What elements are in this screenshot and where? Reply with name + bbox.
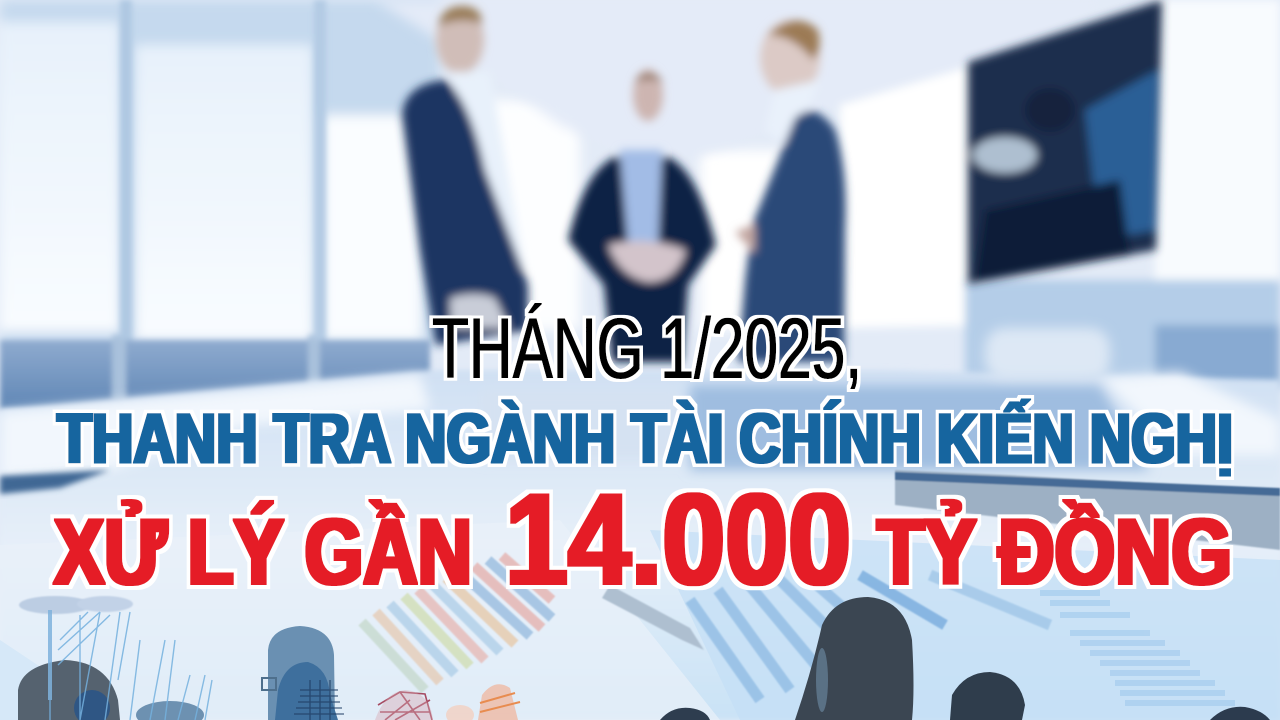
- silhouette: maroon grid head: [378, 692, 432, 720]
- staircase chart: [1040, 590, 1235, 706]
- people: three blurred businessmen: [402, 6, 846, 362]
- striped bar chart: colorful: [362, 556, 552, 690]
- silhouettes of people at bottom: [18, 597, 1270, 720]
- book on right of table: [895, 470, 1280, 550]
- left wall band: [0, 0, 430, 410]
- person right: [735, 20, 846, 362]
- silhouette: orange head: [478, 684, 518, 720]
- silhouette: center-left glasses man: [268, 626, 335, 720]
- person left: [402, 6, 528, 345]
- silhouette: small head center: [660, 708, 710, 720]
- hatched chart over head: [294, 680, 344, 720]
- striped bar chart: blue: [690, 570, 1050, 700]
- left windows: [0, 0, 840, 345]
- left pie chart: [19, 596, 91, 614]
- silhouette: big foreground head: [795, 597, 914, 720]
- wall screen: [968, 0, 1162, 284]
- title line 3: number: 14.000: [505, 466, 851, 612]
- silhouette: small head right: [1210, 707, 1270, 720]
- silhouette: right head: [950, 672, 1025, 720]
- line chart overlay: [50, 610, 212, 720]
- pen: [602, 585, 704, 650]
- document papers: [0, 520, 1280, 720]
- table surface: [0, 370, 1280, 720]
- title line 1: THÁNG 1/2025,: [432, 301, 862, 397]
- blurred table objects: [0, 328, 1280, 478]
- silhouette head: far left: [18, 660, 120, 720]
- silhouette bust: lower left: [136, 701, 204, 720]
- dark table edge: [0, 470, 110, 494]
- title line 3: text: XỬ LÝ GẦN: [54, 499, 472, 604]
- person center: [568, 69, 716, 362]
- ceiling: [375, 0, 1110, 160]
- right windows and panel: [840, 0, 1280, 390]
- title: [54, 301, 1233, 612]
